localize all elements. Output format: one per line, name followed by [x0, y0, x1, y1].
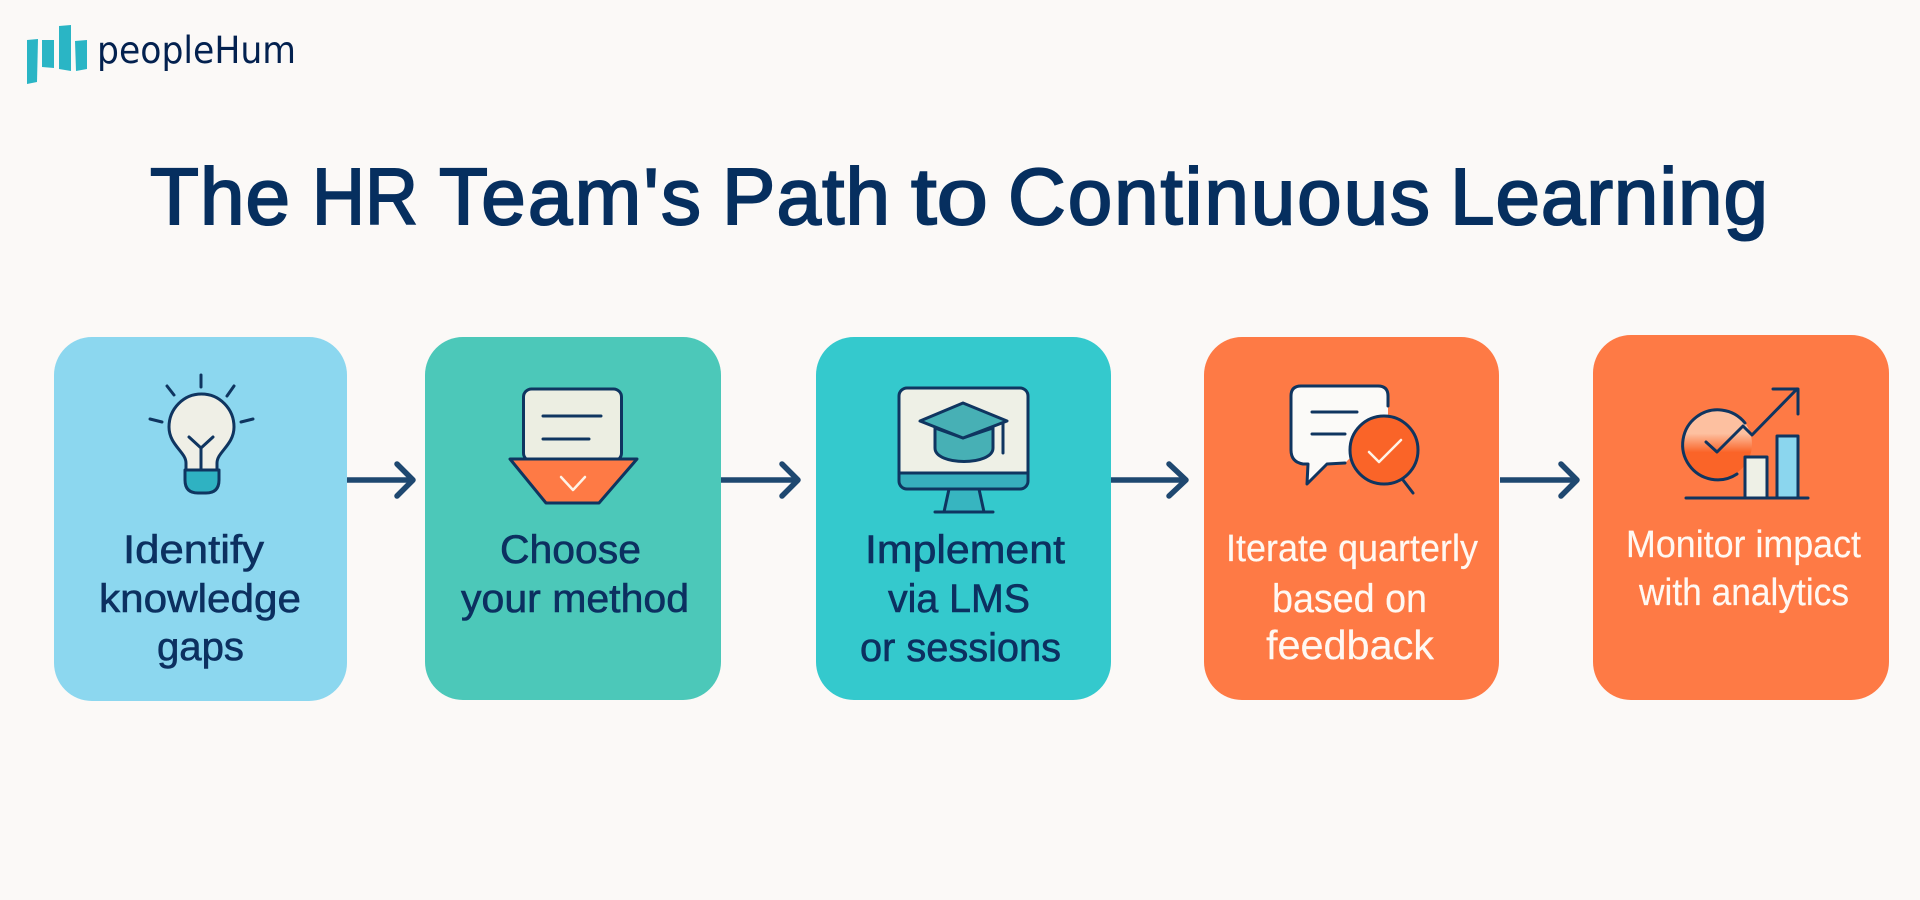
step 5: monitor impact with analytics — [1593, 335, 1889, 700]
title: to — [911, 152, 988, 241]
step label — [1626, 524, 1861, 614]
title: HR — [312, 152, 418, 241]
card background — [425, 337, 721, 700]
arrow 3 to 4 — [1111, 464, 1186, 496]
step label — [461, 528, 689, 621]
step label: Iterate quarterly — [1226, 528, 1478, 570]
card background — [816, 337, 1111, 700]
title: Learning — [1450, 152, 1768, 241]
step 2: choose your method — [425, 337, 721, 700]
step label: based on — [1272, 577, 1427, 621]
step 1: identify knowledge gaps — [54, 337, 347, 701]
step label: with analytics — [1638, 572, 1849, 614]
step label: feedback — [1266, 622, 1435, 668]
step label: Monitor impact — [1626, 524, 1861, 566]
step label: Implement — [865, 528, 1065, 572]
arrow 4 to 5 — [1500, 464, 1577, 496]
step label: knowledge — [99, 577, 301, 621]
card background — [54, 337, 347, 701]
step label — [860, 528, 1065, 670]
step 4: iterate quarterly based on feedback — [1204, 337, 1499, 700]
step 3: implement via LMS or sessions — [816, 337, 1111, 700]
card background — [1204, 337, 1499, 700]
title: Team's — [439, 152, 701, 241]
step label: or sessions — [860, 626, 1061, 670]
icon: light bulb — [150, 375, 253, 493]
card background — [1593, 335, 1889, 700]
title: Continuous — [1008, 152, 1430, 241]
icon: speech bubble with magnifier — [1291, 386, 1418, 493]
icon: monitor with graduation cap — [899, 388, 1028, 512]
title — [150, 152, 1768, 241]
step label — [99, 528, 301, 669]
title: The — [150, 152, 290, 241]
logo wordmark: peopleHum — [97, 29, 296, 72]
step label: via LMS — [888, 577, 1030, 621]
step label: gaps — [157, 625, 244, 669]
logo: peopleHum — [27, 25, 296, 84]
icon: logo bars — [27, 25, 87, 84]
step label: your method — [461, 577, 689, 621]
step label: Identify — [123, 528, 264, 572]
icon: analytics chart — [1682, 389, 1808, 498]
step label: Choose — [500, 528, 641, 572]
icon: document in tray — [510, 389, 637, 503]
arrow 1 to 2 — [347, 464, 413, 496]
arrow 2 to 3 — [721, 464, 798, 496]
title: Path — [722, 152, 890, 241]
step label — [1226, 528, 1478, 668]
